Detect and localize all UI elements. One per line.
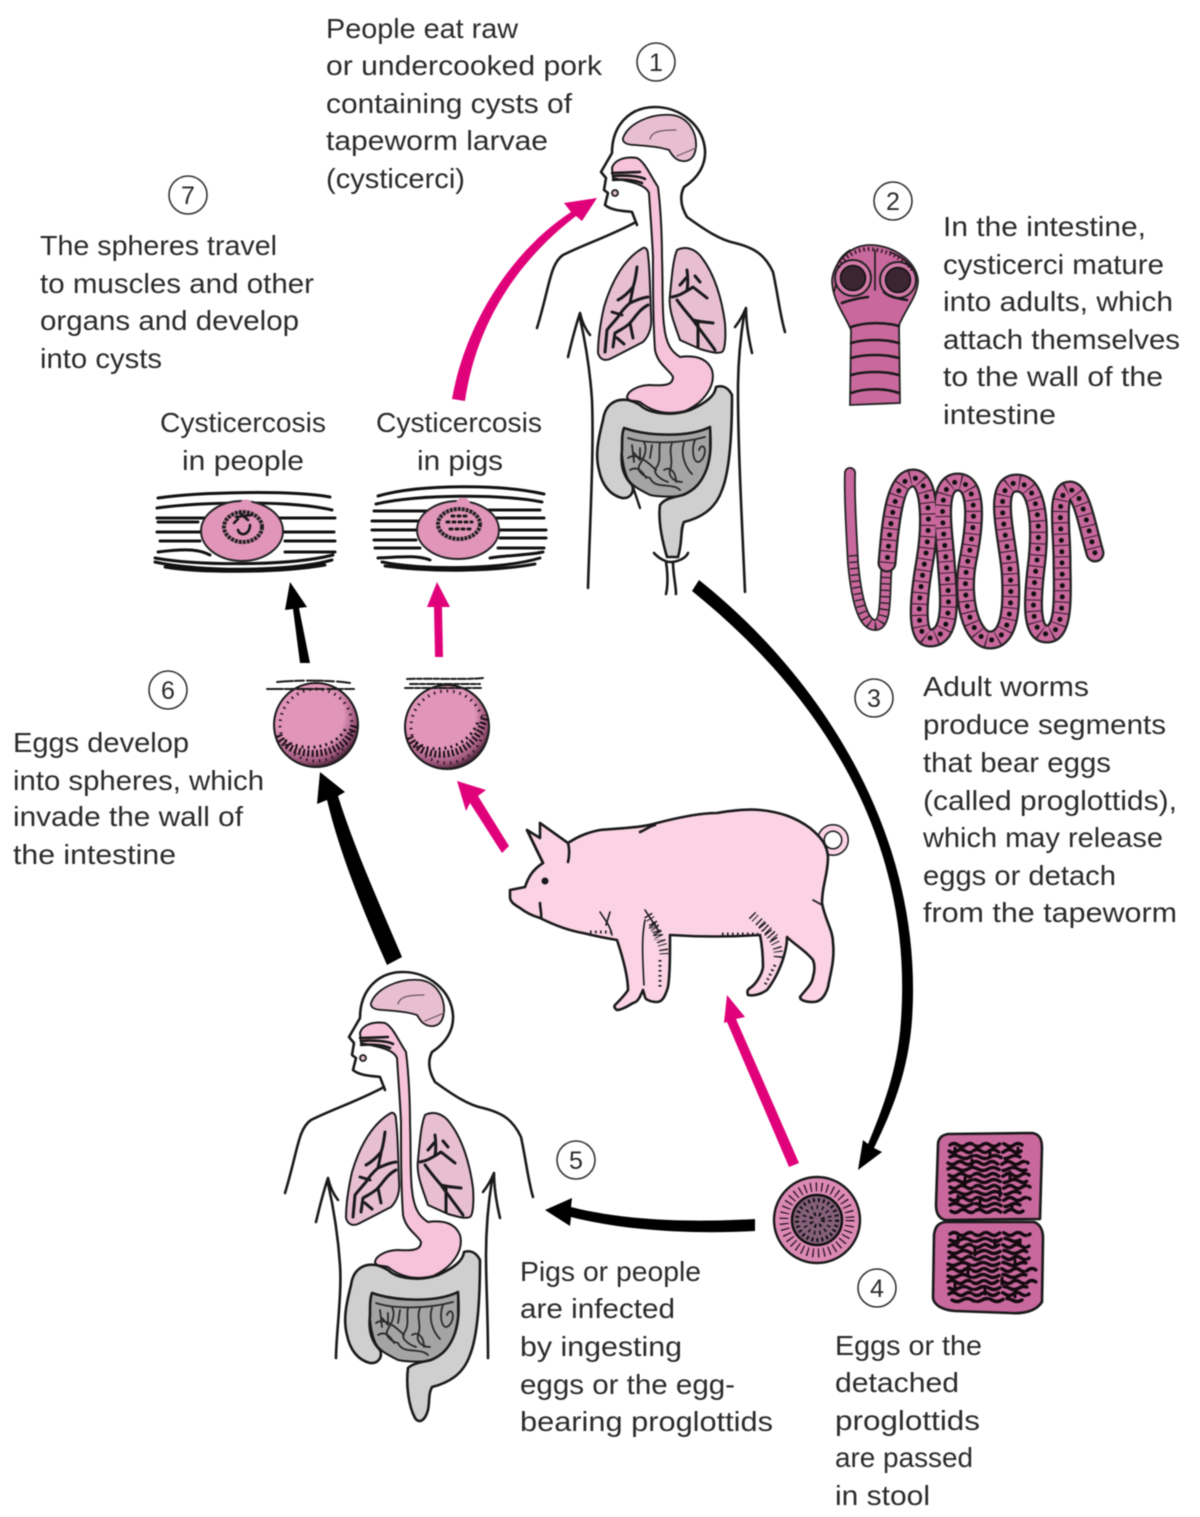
arrow: black, person to sphere <box>317 772 402 965</box>
step 3 text: produce segments <box>923 709 1166 740</box>
tapeworm head <box>832 245 918 405</box>
step 7 number <box>169 176 207 214</box>
arrow: black up to human cyst <box>285 582 310 663</box>
step 1 text: eating raw pork: tapeworm larvae <box>326 125 548 156</box>
step 7 text: into cysts <box>40 343 162 374</box>
step 2 text <box>943 211 1180 430</box>
step 5 text: by ingesting <box>520 1331 682 1362</box>
step 3 number: 3 <box>867 685 881 713</box>
cyst in human muscle <box>155 493 335 571</box>
step 6 text: into spheres, which <box>13 765 264 796</box>
step 5 number <box>557 1141 595 1179</box>
step 4 text: in stool <box>835 1480 930 1511</box>
step 6 text: invade the wall of <box>13 801 243 832</box>
step 4 text: proglottids <box>835 1405 980 1436</box>
step 1 text: eating raw pork <box>326 13 602 194</box>
step 3 text <box>922 671 1177 928</box>
step 4 text: detached <box>835 1367 959 1398</box>
step 3 text: (called proglottids), <box>923 785 1177 816</box>
step 2 text: to the wall of the <box>943 361 1163 392</box>
step 2 number <box>874 182 912 220</box>
arrow: pink, pig to sphere <box>457 781 509 853</box>
label: cysticercosis in pigs <box>376 407 542 476</box>
step 3 text: from the tapeworm <box>923 897 1177 928</box>
step 3 number <box>855 679 893 717</box>
step 4 number <box>858 1269 896 1307</box>
step 2 text: attach themselves <box>943 324 1180 355</box>
label: cysticercosis in pigs: in pigs <box>417 445 503 476</box>
step 3 text: that bear eggs <box>923 747 1111 778</box>
step 7 number: 7 <box>181 182 195 210</box>
pig <box>510 810 845 1010</box>
human figure: upper, with legs and side arrows <box>537 107 785 594</box>
step 6 text <box>13 727 264 870</box>
step 6 text: Eggs develop <box>13 727 189 758</box>
tapeworm egg <box>774 1177 860 1263</box>
step 6 number: 6 <box>161 677 175 705</box>
step 5 number: 5 <box>569 1147 583 1175</box>
label: cysticercosis in people: Cysticercosis <box>160 407 326 438</box>
arrow: pink up to pig cyst <box>427 582 450 657</box>
proglottids: detached segments <box>933 1133 1043 1313</box>
step 5 text: bearing proglottids <box>520 1406 773 1437</box>
step 5 text: eggs or the egg- <box>520 1369 735 1400</box>
arrow: black, tapeworm to eggs <box>692 580 913 1170</box>
label: cysticercosis in people <box>160 407 326 476</box>
label: cysticercosis in people: in people <box>182 445 304 476</box>
step 1 number <box>637 43 675 81</box>
tapeworm body <box>850 473 1095 640</box>
arrow: pink, eggs to pig <box>724 995 799 1167</box>
step 5 text <box>520 1256 773 1437</box>
step 3 text: Adult worms <box>923 671 1089 702</box>
step 2 number: 2 <box>886 188 900 216</box>
step 6 text: the intestine <box>13 839 176 870</box>
step 4 text: are passed <box>835 1442 973 1473</box>
cyst in pig muscle <box>372 487 546 570</box>
step 2 text: cysticerci mature <box>943 249 1164 280</box>
step 1 text: eating raw pork: or undercooked pork <box>326 50 602 81</box>
step 2 text: In the intestine, <box>943 211 1146 242</box>
step 1 text: eating raw pork: People eat raw <box>326 13 518 44</box>
step 4 number: 4 <box>870 1275 884 1303</box>
step 3 text: eggs or detach <box>923 860 1116 891</box>
step 3 text: which may release <box>922 822 1163 853</box>
step 4 text <box>835 1330 982 1511</box>
step 5 text: Pigs or people <box>520 1256 701 1287</box>
step 7 text: The spheres travel <box>40 230 277 261</box>
step 6 number <box>149 671 187 709</box>
step 2 text: intestine <box>943 399 1056 430</box>
sphere in pig intestine wall <box>405 678 489 769</box>
step 2 text: into adults, which <box>943 286 1173 317</box>
step 7 text: to muscles and other <box>40 268 314 299</box>
step 1 text: eating raw pork: (cysticerci) <box>326 163 465 194</box>
sphere in human intestine wall <box>267 681 358 767</box>
step 7 text <box>40 230 314 374</box>
label: cysticercosis in pigs: Cysticercosis <box>376 407 542 438</box>
human figure: lower, infected <box>285 972 533 1421</box>
step 1 number: 1 <box>649 49 663 77</box>
arrow: black, eggs to person <box>545 1198 755 1232</box>
step 5 text: are infected <box>520 1293 675 1324</box>
step 1 text: eating raw pork: containing cysts of <box>326 88 572 119</box>
step 4 text: Eggs or the <box>835 1330 982 1361</box>
step 7 text: organs and develop <box>40 305 299 336</box>
arrow: pink, pork eaten by person <box>452 198 597 401</box>
